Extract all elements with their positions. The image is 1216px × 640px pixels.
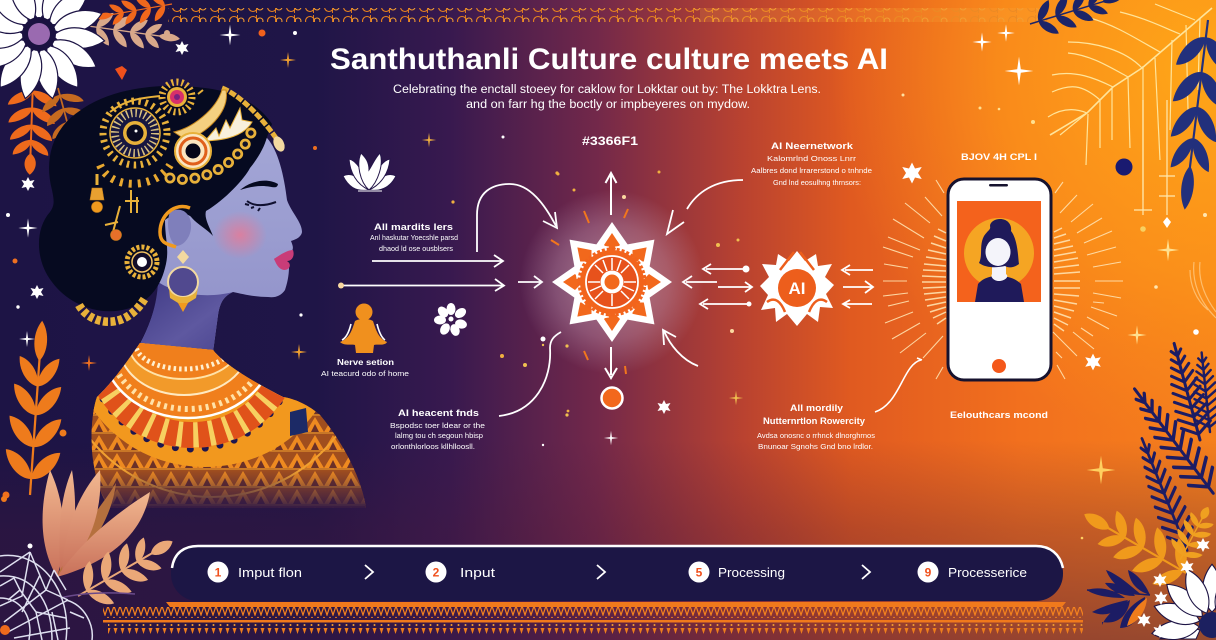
navy and gold sprig [34, 82, 102, 168]
drooping gold petals under wheel [100, 165, 170, 184]
pill [171, 546, 1063, 601]
text block: person caption [321, 357, 409, 378]
petals [552, 222, 672, 342]
decorative foliage top left [0, 0, 183, 176]
forehead jewel [271, 135, 287, 153]
text block: lower left: lalmg tou ch segoun hbisp [395, 431, 483, 440]
title: Santhuthanli Culture culture meets AI [330, 43, 888, 76]
tan leaf sprig [85, 7, 183, 58]
central label: #3366F1 [582, 136, 639, 148]
text block: AI network: Aalbres dond lrrarerstond o tnhnde [751, 166, 872, 175]
text block: lower left [390, 408, 485, 451]
bead arc [170, 130, 252, 179]
step 4: Processerice [948, 565, 1027, 580]
step 4: 9 [925, 566, 932, 580]
star mandala hub [520, 190, 704, 374]
orange fern lower right [1069, 488, 1216, 603]
palm frond outline top right [1048, 4, 1212, 200]
arrow lower straight with dot [338, 279, 504, 291]
navy leaves top right [1024, 0, 1216, 213]
icon: lotus [343, 153, 396, 191]
subtitle: Celebrating the enctall stoeey for caklow for Lokktar out by: The Lokktra Lens. [393, 84, 821, 96]
hanging branch [1154, 16, 1216, 213]
text block: left input one [370, 222, 458, 253]
step 1: Imput flon [238, 565, 302, 580]
process flow bar [171, 546, 1063, 601]
dress with patterned collar [92, 343, 366, 508]
text block: person caption: AI teacurd odo of home [321, 369, 409, 378]
headpiece teeth [205, 108, 252, 141]
phone label: BJOV 4H CPL I [961, 152, 1037, 163]
icon: white blossom [434, 303, 468, 337]
small white stars lower right [1138, 538, 1210, 638]
central sparks [422, 94, 904, 446]
step 3 [688, 562, 785, 582]
icon: navy dot [1116, 158, 1132, 176]
hair [39, 86, 272, 311]
large gold wheel [103, 101, 167, 165]
right exchange arrows [842, 265, 873, 308]
gold headband [222, 88, 276, 138]
ring ornament [175, 133, 211, 169]
text block: AI network [751, 141, 872, 187]
neck shading [140, 282, 233, 352]
gold headpiece crescent [174, 90, 226, 140]
arrow short into star [518, 276, 542, 288]
navy leaves base right [1087, 570, 1150, 628]
dangling gold charms [90, 174, 139, 240]
arrows around AI badge [663, 180, 873, 366]
soft glow [520, 190, 704, 374]
icon: white flower top left [0, 0, 106, 101]
step 3: Processing [718, 565, 785, 580]
step 2 [426, 562, 495, 582]
text block: lower right of AI: All mordily [790, 403, 844, 414]
icon: lace flower lower left [0, 544, 92, 640]
phone body [948, 179, 1051, 380]
subtitle: and on farr hg the boctly or impbeyeres on mydow. [466, 99, 750, 111]
output dot [602, 388, 622, 408]
step 2: 2 [433, 566, 440, 580]
gold bun necklace [79, 298, 145, 322]
plant: orange leaves lower left [0, 318, 74, 502]
step 4 [918, 562, 1027, 582]
arrow up from hub [606, 173, 616, 215]
text block: lower left: Bspodsc toer ldear or the [390, 421, 485, 430]
arrow to phone [875, 358, 922, 412]
text block: left input one: All mardits lers [374, 222, 453, 233]
phone mockup [948, 179, 1051, 380]
step 1 [208, 562, 302, 582]
text block: person caption: Nerve setion [337, 357, 394, 367]
arrow upper straight [372, 255, 503, 267]
pink top jewel [162, 82, 192, 112]
photo panel with portrait [957, 201, 1041, 302]
chevron 2 [597, 565, 605, 579]
top ornamental border [168, 8, 1048, 22]
text block: lower right of AI: Bnunoar Sgnohs Gnd bno lrdlor. [758, 442, 873, 451]
phone rays [883, 180, 1123, 379]
text block: lower left: AI heacent fnds [398, 408, 479, 419]
text block: AI network: AI Neernetwork [771, 141, 854, 152]
hoop earring [168, 250, 198, 312]
subtitle [393, 84, 821, 111]
plant: tan leaves lower left [43, 470, 187, 621]
record button [992, 359, 1006, 373]
decorative sparkles left [6, 25, 317, 371]
step 1: 1 [215, 566, 222, 580]
text block: lower right of AI: Avdsa onosnc o rrhnck dlnorghrnos [757, 431, 875, 440]
hanging ornaments right [1134, 100, 1216, 318]
curved arrow from network text [667, 180, 743, 234]
arrows from left to centre [338, 184, 561, 416]
ferns lower right [1122, 339, 1216, 555]
bottom ornamental border [103, 602, 1083, 635]
icon: AI badge: AI [788, 279, 806, 298]
chevron 1 [365, 565, 373, 579]
step 3: 5 [696, 566, 703, 580]
text block: AI network: Kalomrlnd Onoss Lnrr [767, 154, 857, 163]
arrow down from hub [605, 347, 617, 378]
top highlight [172, 546, 1063, 568]
step 2: Input [460, 565, 495, 580]
illustration: woman in profile [39, 82, 375, 510]
top branch [1024, 0, 1130, 43]
text block: AI network: Gnd lnd eosulhng thrnsors: [773, 178, 861, 187]
chevron 3 [862, 565, 870, 579]
blush [213, 211, 267, 259]
orange leaf sprig top [92, 0, 175, 34]
text block: left input one: dhaod ld ose ousblsers [379, 244, 453, 253]
face [140, 138, 302, 352]
arrow curved from lower left [499, 332, 561, 416]
icon: AI badge [760, 251, 834, 326]
speaker [989, 184, 1008, 186]
text block: lower right of AI [757, 403, 875, 451]
icon: white flower lower right [1151, 564, 1216, 640]
arrow curved over [477, 184, 557, 252]
hair side medallion [127, 247, 157, 277]
phone caption: Eelouthcars mcond [950, 410, 1048, 421]
text block: lower right of AI: Nutternrtlon Rowercity [763, 416, 866, 427]
brow eye and lips [240, 181, 278, 190]
text block: left input one: Anl haskutar Yoecshle parsd [370, 233, 458, 242]
curved arrow from lower label [663, 330, 698, 366]
decorative stars right [902, 24, 1207, 539]
icon: meditating person [340, 304, 387, 353]
left exchange arrows [683, 264, 752, 309]
ear [168, 210, 191, 246]
text block: lower left: orlonthlorloos kllhlloosll. [391, 442, 475, 451]
orange hanging sprig [1, 81, 61, 176]
wheel [579, 249, 645, 315]
